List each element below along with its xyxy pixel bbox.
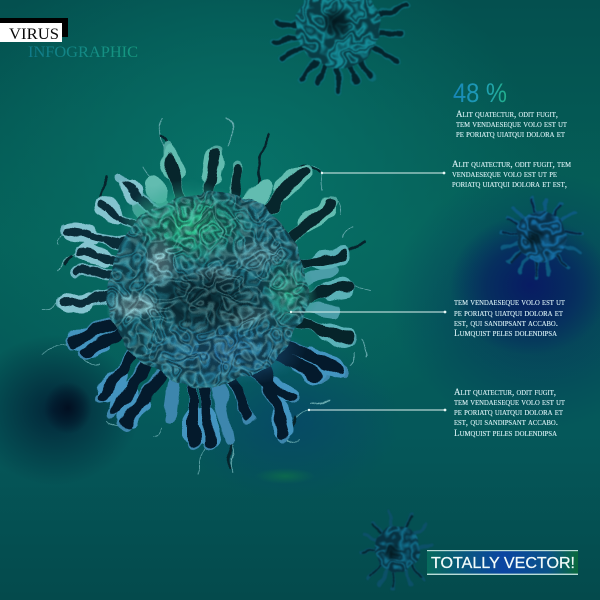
spikes: top green-teal <box>140 152 332 247</box>
bright fold lines <box>108 192 307 386</box>
text block 1: pe poriatq uiatqui dolora et <box>456 129 566 140</box>
virus core body <box>106 181 316 388</box>
text block 3: est, qui sandipsant accabo. <box>454 318 558 329</box>
text block 2: Alit quatectur, odit fugit, tem <box>452 159 572 170</box>
title label: VIRUS: VIRUS <box>9 26 59 43</box>
text block 1: tem vendaeseque volo est ut <box>456 119 568 130</box>
text block 3 <box>454 297 566 339</box>
spikes: left pale blue <box>62 182 160 305</box>
callout line 3 <box>308 409 446 411</box>
icon: virus, top small <box>274 0 406 92</box>
badge: totally vector <box>427 550 578 575</box>
text block 3: Lumquist peles dolendipsa <box>454 328 557 339</box>
text block 2: poriatq uiatqui dolora et est, <box>452 179 567 190</box>
text block 4: Alit quatectur, odit fugit, <box>454 387 556 398</box>
dark centre of core <box>146 266 270 334</box>
icon: virus, bottom small <box>361 512 431 588</box>
pale highlights <box>106 291 166 321</box>
spikes: bottom blue <box>70 320 343 444</box>
green glow, top of core <box>118 181 262 269</box>
text block 2 <box>452 159 572 190</box>
text block 1: Alit quatectur, odit fugit, <box>456 109 558 120</box>
text block 4: Lumquist peles dolendipsa <box>454 428 557 439</box>
thin tails <box>40 118 372 474</box>
callout line 1 <box>321 172 445 174</box>
text block 3: tem vendaeseque volo est ut <box>454 297 566 308</box>
spikes: right <box>280 254 352 340</box>
green glow, right of core <box>260 254 316 326</box>
title label: VIRUS <box>0 18 68 43</box>
subtitle: INFOGRAPHIC: INFOGRAPHIC <box>28 44 138 61</box>
text block 3: pe poriatq uiatqui dolora et <box>454 308 564 319</box>
main virus illustration <box>40 118 372 474</box>
stat: 48 %: 48 % <box>453 78 507 108</box>
text block 4: pe poriatq uiatqui dolora et <box>454 407 564 418</box>
text block 4: est, qui sandipsant accabo. <box>454 417 558 428</box>
badge: totally vector: TOTALLY VECTOR! <box>431 555 575 572</box>
text block 1 <box>456 109 568 140</box>
icon: virus, right small <box>501 198 582 278</box>
text block 2: vendaeseque volo est ut pe <box>452 169 557 180</box>
text block 4 <box>454 387 566 439</box>
blue lower region <box>137 316 307 388</box>
text block 4: tem vendaeseque volo est ut <box>454 397 566 408</box>
callout line 2 <box>290 311 446 313</box>
dark folds <box>108 192 307 386</box>
